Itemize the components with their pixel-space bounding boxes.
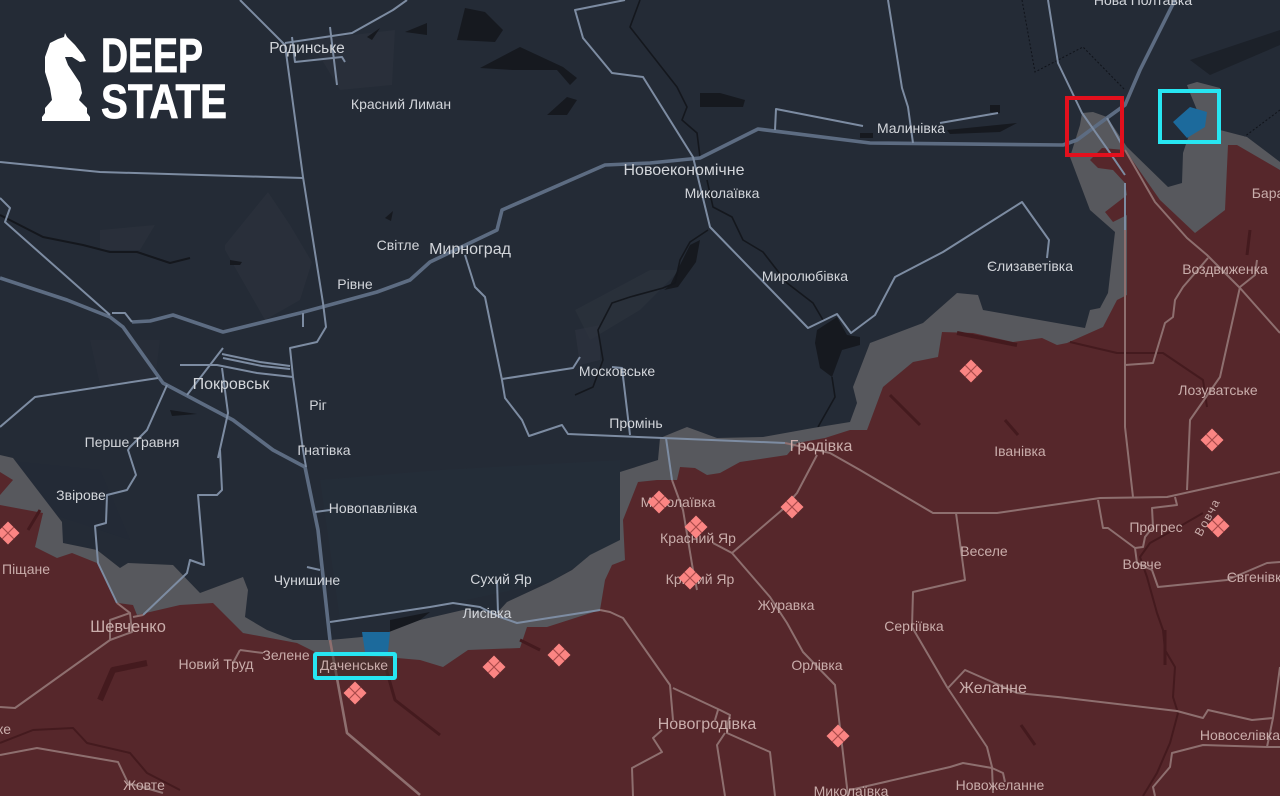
place labels on dark territory: Новоекономічне bbox=[623, 162, 745, 179]
place labels on occupied territory: Веселе bbox=[960, 543, 1008, 559]
place labels on occupied territory: Красний Яр bbox=[660, 530, 736, 546]
place labels on occupied territory: Жовте bbox=[123, 777, 165, 793]
logo bbox=[42, 30, 227, 129]
place labels on occupied territory: Лозуватське bbox=[1178, 382, 1258, 398]
terrain: dark reservoirs and ponds bbox=[170, 8, 1280, 632]
place labels on occupied territory: Миколаївка bbox=[641, 494, 716, 510]
place labels on occupied territory: Іванівка bbox=[994, 443, 1046, 459]
place labels on occupied territory: Піщане bbox=[2, 561, 50, 577]
callout: Dachenske bbox=[315, 654, 395, 678]
place labels on dark territory bbox=[56, 0, 1192, 621]
logo wordmark: STATE: STATE bbox=[101, 76, 227, 129]
place labels on occupied territory: Вовча bbox=[1192, 496, 1223, 538]
place labels on dark territory: Ріг bbox=[309, 397, 327, 413]
marker: east group bbox=[826, 360, 1230, 748]
occupied shard at left edge bbox=[0, 472, 13, 495]
military unit markers bbox=[0, 360, 1230, 748]
place labels on dark territory: Світле bbox=[377, 237, 420, 253]
place labels on dark territory: Звірове bbox=[56, 487, 106, 503]
place labels on dark territory: Лисівка bbox=[463, 605, 512, 621]
road network: secondary roads on controlled territory bbox=[0, 0, 1125, 623]
marker: west group bbox=[0, 522, 570, 704]
place labels on dark territory: Гнатівка bbox=[297, 442, 351, 458]
place labels on dark territory: Промінь bbox=[609, 415, 663, 431]
marker: central group bbox=[648, 490, 804, 590]
place labels on dark territory: Московське bbox=[579, 363, 655, 379]
callout: Dachenske: Даченське bbox=[320, 657, 388, 673]
place labels on dark territory: Красний Лиман bbox=[351, 96, 451, 112]
place labels on dark territory: Чунишине bbox=[274, 572, 340, 588]
logo wordmark: DEEP: DEEP bbox=[101, 30, 203, 83]
place labels on dark territory: Сухий Яр bbox=[470, 571, 532, 587]
place labels on occupied territory: Новоселівка bbox=[1200, 727, 1280, 743]
place labels on occupied territory: Гродівка bbox=[790, 438, 853, 455]
callout: cyan frame bbox=[1160, 91, 1219, 142]
place labels on occupied territory: Прогрес bbox=[1129, 519, 1183, 535]
place labels on occupied territory: Вовче bbox=[1122, 556, 1162, 572]
place labels on occupied territory: Шевченко bbox=[90, 618, 166, 636]
place labels on occupied territory: Сергіївка bbox=[884, 618, 944, 634]
terrain: lighter settlement patches bbox=[0, 30, 680, 620]
icon: blue area in cyan frame bbox=[1173, 107, 1207, 138]
place labels on dark territory: Малинівка bbox=[877, 120, 945, 136]
place labels on occupied territory: Новий Труд bbox=[179, 656, 253, 672]
blue area near Dachenske bbox=[362, 632, 390, 652]
place labels on occupied territory: Кривий Яр bbox=[666, 571, 735, 587]
place labels on dark territory: Єлизаветівка bbox=[987, 258, 1073, 274]
place labels on dark territory: Миколаївка bbox=[685, 185, 760, 201]
place labels on occupied territory: Зелене bbox=[262, 647, 310, 663]
place labels on dark territory: Покровськ bbox=[193, 376, 270, 393]
callout: red frame bbox=[1067, 98, 1122, 155]
terrain: rivers and ravines in occupied area bbox=[0, 230, 1250, 796]
place labels on dark territory: Миролюбівка bbox=[762, 268, 848, 284]
road network: main roads on controlled territory bbox=[0, 0, 1175, 640]
border lines dotted bbox=[1022, 0, 1280, 200]
place labels on dark territory: Мирноград bbox=[429, 241, 512, 258]
place labels on dark territory: Перше Травня bbox=[85, 434, 179, 450]
place labels on occupied territory: Воздвиженка bbox=[1182, 261, 1268, 277]
rivers on controlled territory bbox=[0, 0, 835, 427]
icon: chess knight bbox=[42, 33, 90, 121]
place labels on dark territory: Рівне bbox=[337, 276, 373, 292]
place labels on occupied territory: Журавка bbox=[758, 597, 815, 613]
place labels on occupied territory bbox=[0, 185, 1280, 796]
place labels on dark territory: Новопавлівка bbox=[329, 500, 417, 516]
place labels on dark territory: Родинське bbox=[269, 40, 345, 57]
place labels on occupied territory: Новожеланне bbox=[956, 777, 1045, 793]
place labels on occupied territory: Новогродівка bbox=[658, 716, 756, 733]
place labels on occupied territory: Орлівка bbox=[791, 657, 843, 673]
place labels on occupied territory: Желанне bbox=[959, 680, 1027, 697]
